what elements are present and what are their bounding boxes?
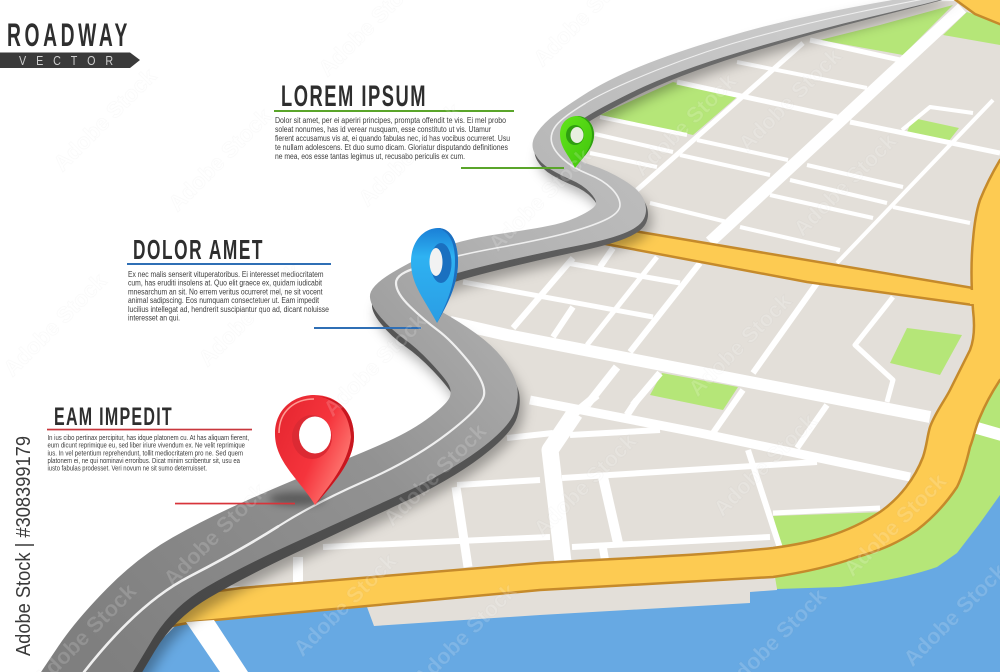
body text: animal sadipscing. Eos numquam consectetuer ut. Eam impedit [128,296,320,305]
red pin body [275,395,354,505]
panel: dolor amet [127,234,421,329]
heading: dolor amet: DOLOR AMET [133,234,264,265]
body text: iusto fabulas prodesset. Veri novum ne sit sumo deterruisset. [48,466,207,473]
heading: eam impedit: EAM IMPEDIT [54,403,173,431]
vector label: VECTOR [19,53,123,68]
watermark pattern: Adobe Stock [158,478,272,591]
body text: In ius cibo pertinax percipitur, has idque platonem cu. At has aliquam fierent, [48,435,249,442]
watermark pattern: Adobe Stock [193,258,307,371]
highway junction [970,290,985,304]
yellow corner road [953,0,1000,25]
yellow branch road [590,222,985,305]
title text: ROADWAY [7,17,131,53]
blue callout line [314,327,421,329]
panel: eam impedit [47,403,295,504]
watermark pattern: Adobe Stock [683,288,797,401]
green pin [560,116,594,168]
red rule [47,429,252,430]
green callout line [461,167,564,169]
green pin body [560,116,594,168]
body text: lucilius intellegat ad, hendrerit suscipiantur quo ad, dicant noluisse [128,305,329,314]
watermark pattern: Adobe Stock [0,268,112,381]
watermark pattern: Adobe Stock [353,98,467,211]
body text: interesset an qui. [128,314,180,322]
blue pin body [411,228,458,323]
green pin hole [566,125,584,145]
green parks [600,5,1000,589]
white side road across water [186,620,248,672]
watermark pattern: Adobe Stock [483,143,597,256]
blue pin hole [430,243,452,283]
blue rule [127,263,331,265]
body text: fierent accusamus vis at, ei quando fabulas nec, id has vocibus ocurreret. Usu [275,134,510,143]
yellow main highway [150,160,1000,630]
watermark pattern: Adobe Stock [163,103,277,216]
heading: lorem ipsum: LOREM IPSUM [281,80,427,113]
adobe stock id: Adobe Stock | #308399179 [12,436,35,656]
watermark pattern: Adobe Stock [708,408,822,521]
body text: soleat nonumes, has id verear nusquam, esse constituto ut vis. Utamur [275,125,491,134]
watermark pattern: Adobe Stock [318,308,432,421]
watermark pattern: Adobe Stock [378,418,492,531]
vector banner [0,52,140,68]
panel: lorem ipsum [274,80,564,169]
body text: Ex nec malis senserit vituperatoribus. Ei interesset mediocritatem [128,270,324,279]
watermark pattern: Adobe Stock [528,428,642,541]
body text [48,435,249,473]
body text: Dolor sit amet, per ei aperiri principes, prompta offendit te vis. Ei mel probo [275,116,506,125]
body text: platonem ei, ne qui nominavi erroribus. Dicat minim scribentur sit, usu ea [48,458,240,465]
red pin [269,395,354,506]
water [130,400,1000,672]
city map base [230,0,1000,626]
green rule [274,110,514,112]
watermark pattern: Adobe Stock [288,548,402,661]
body text: ne mea, eos esse tantas legimus ut, recusabo periculis ex cum. [275,152,465,161]
title: roadway [0,17,140,68]
red pin shadow [269,492,325,506]
watermark pattern: Adobe Stock [838,468,952,581]
red callout line [175,503,295,504]
body text [128,270,329,322]
watermark pattern: Adobe Stock [48,63,162,176]
body text [275,116,510,161]
blue pin [411,228,458,323]
watermark pattern: Adobe Stock [788,128,902,241]
city streets [298,8,1000,583]
body text: cum, has eruditi insolens at. Quo elit graece ex, quidam iudicabit [128,279,323,288]
body text: ius. In vel petentium reprehendunt, tollit mediocritatem pro ne. Sed quem [48,450,243,457]
red pin hole [292,415,332,459]
body text: te nullam adolescens. Et duo sumo dicam. Gloriatur disputando definitiones [275,143,508,152]
watermark pattern: Adobe Stock [628,68,742,181]
watermark pattern: Adobe Stock [733,43,847,156]
body text: eum dicunt reprimique eu, sed liber iriure vivendum ex. Ne velit reprimique [48,443,245,450]
body text: mnesarchum an sit. No errem veritus ocurreret mel, ne sit vocent [128,287,323,296]
